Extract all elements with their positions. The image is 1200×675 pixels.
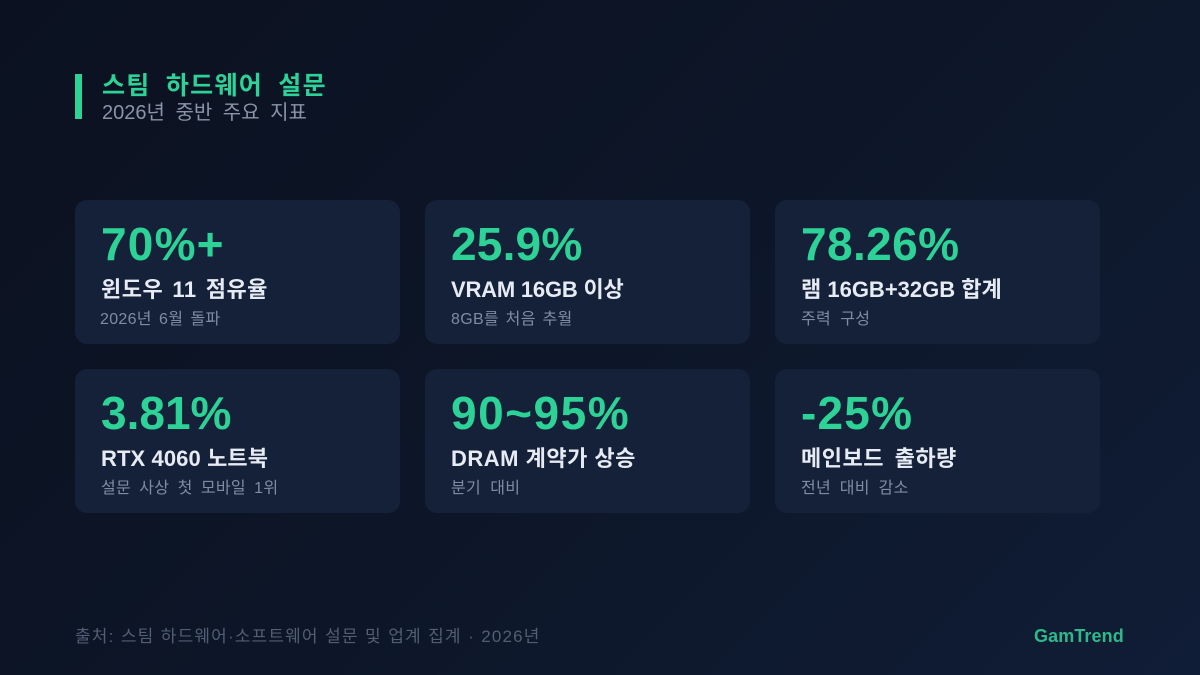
panel: motherboard — [775, 369, 1100, 513]
label: 램 16GB+32GB 합계 — [801, 277, 1002, 302]
value: -25% — [801, 387, 913, 439]
label: RTX 4060 노트북 — [101, 446, 268, 471]
brand logo: GamTrend — [1034, 626, 1124, 646]
source note: 출처: 스팀 하드웨어·소프트웨어 설문 및 업계 집계 · 2026년 — [75, 627, 540, 646]
label: 윈도우 11 점유율 — [101, 277, 268, 302]
panel: Windows 11 — [75, 200, 400, 344]
note: 8GB를 처음 추월 — [451, 311, 573, 328]
label: DRAM 계약가 상승 — [451, 446, 636, 471]
panel: DRAM — [425, 369, 750, 513]
accent bar — [75, 74, 82, 119]
value: 78.26% — [801, 218, 959, 270]
value: 90~95% — [451, 387, 630, 439]
panel: RTX 4060 — [75, 369, 400, 513]
note: 주력 구성 — [801, 311, 870, 328]
value: 70%+ — [101, 218, 225, 270]
panel: RAM — [775, 200, 1100, 344]
label: VRAM 16GB 이상 — [451, 277, 624, 302]
value: 25.9% — [451, 218, 582, 270]
value: 3.81% — [101, 387, 231, 439]
title: 스팀 하드웨어 설문 — [102, 72, 327, 100]
label: 메인보드 출하량 — [801, 446, 957, 471]
note: 전년 대비 감소 — [801, 480, 909, 497]
note: 2026년 6월 돌파 — [100, 311, 221, 328]
note: 분기 대비 — [451, 480, 520, 497]
panel: VRAM — [425, 200, 750, 344]
subtitle: 2026년 중반 주요 지표 — [102, 102, 307, 124]
note: 설문 사상 첫 모바일 1위 — [101, 480, 278, 497]
